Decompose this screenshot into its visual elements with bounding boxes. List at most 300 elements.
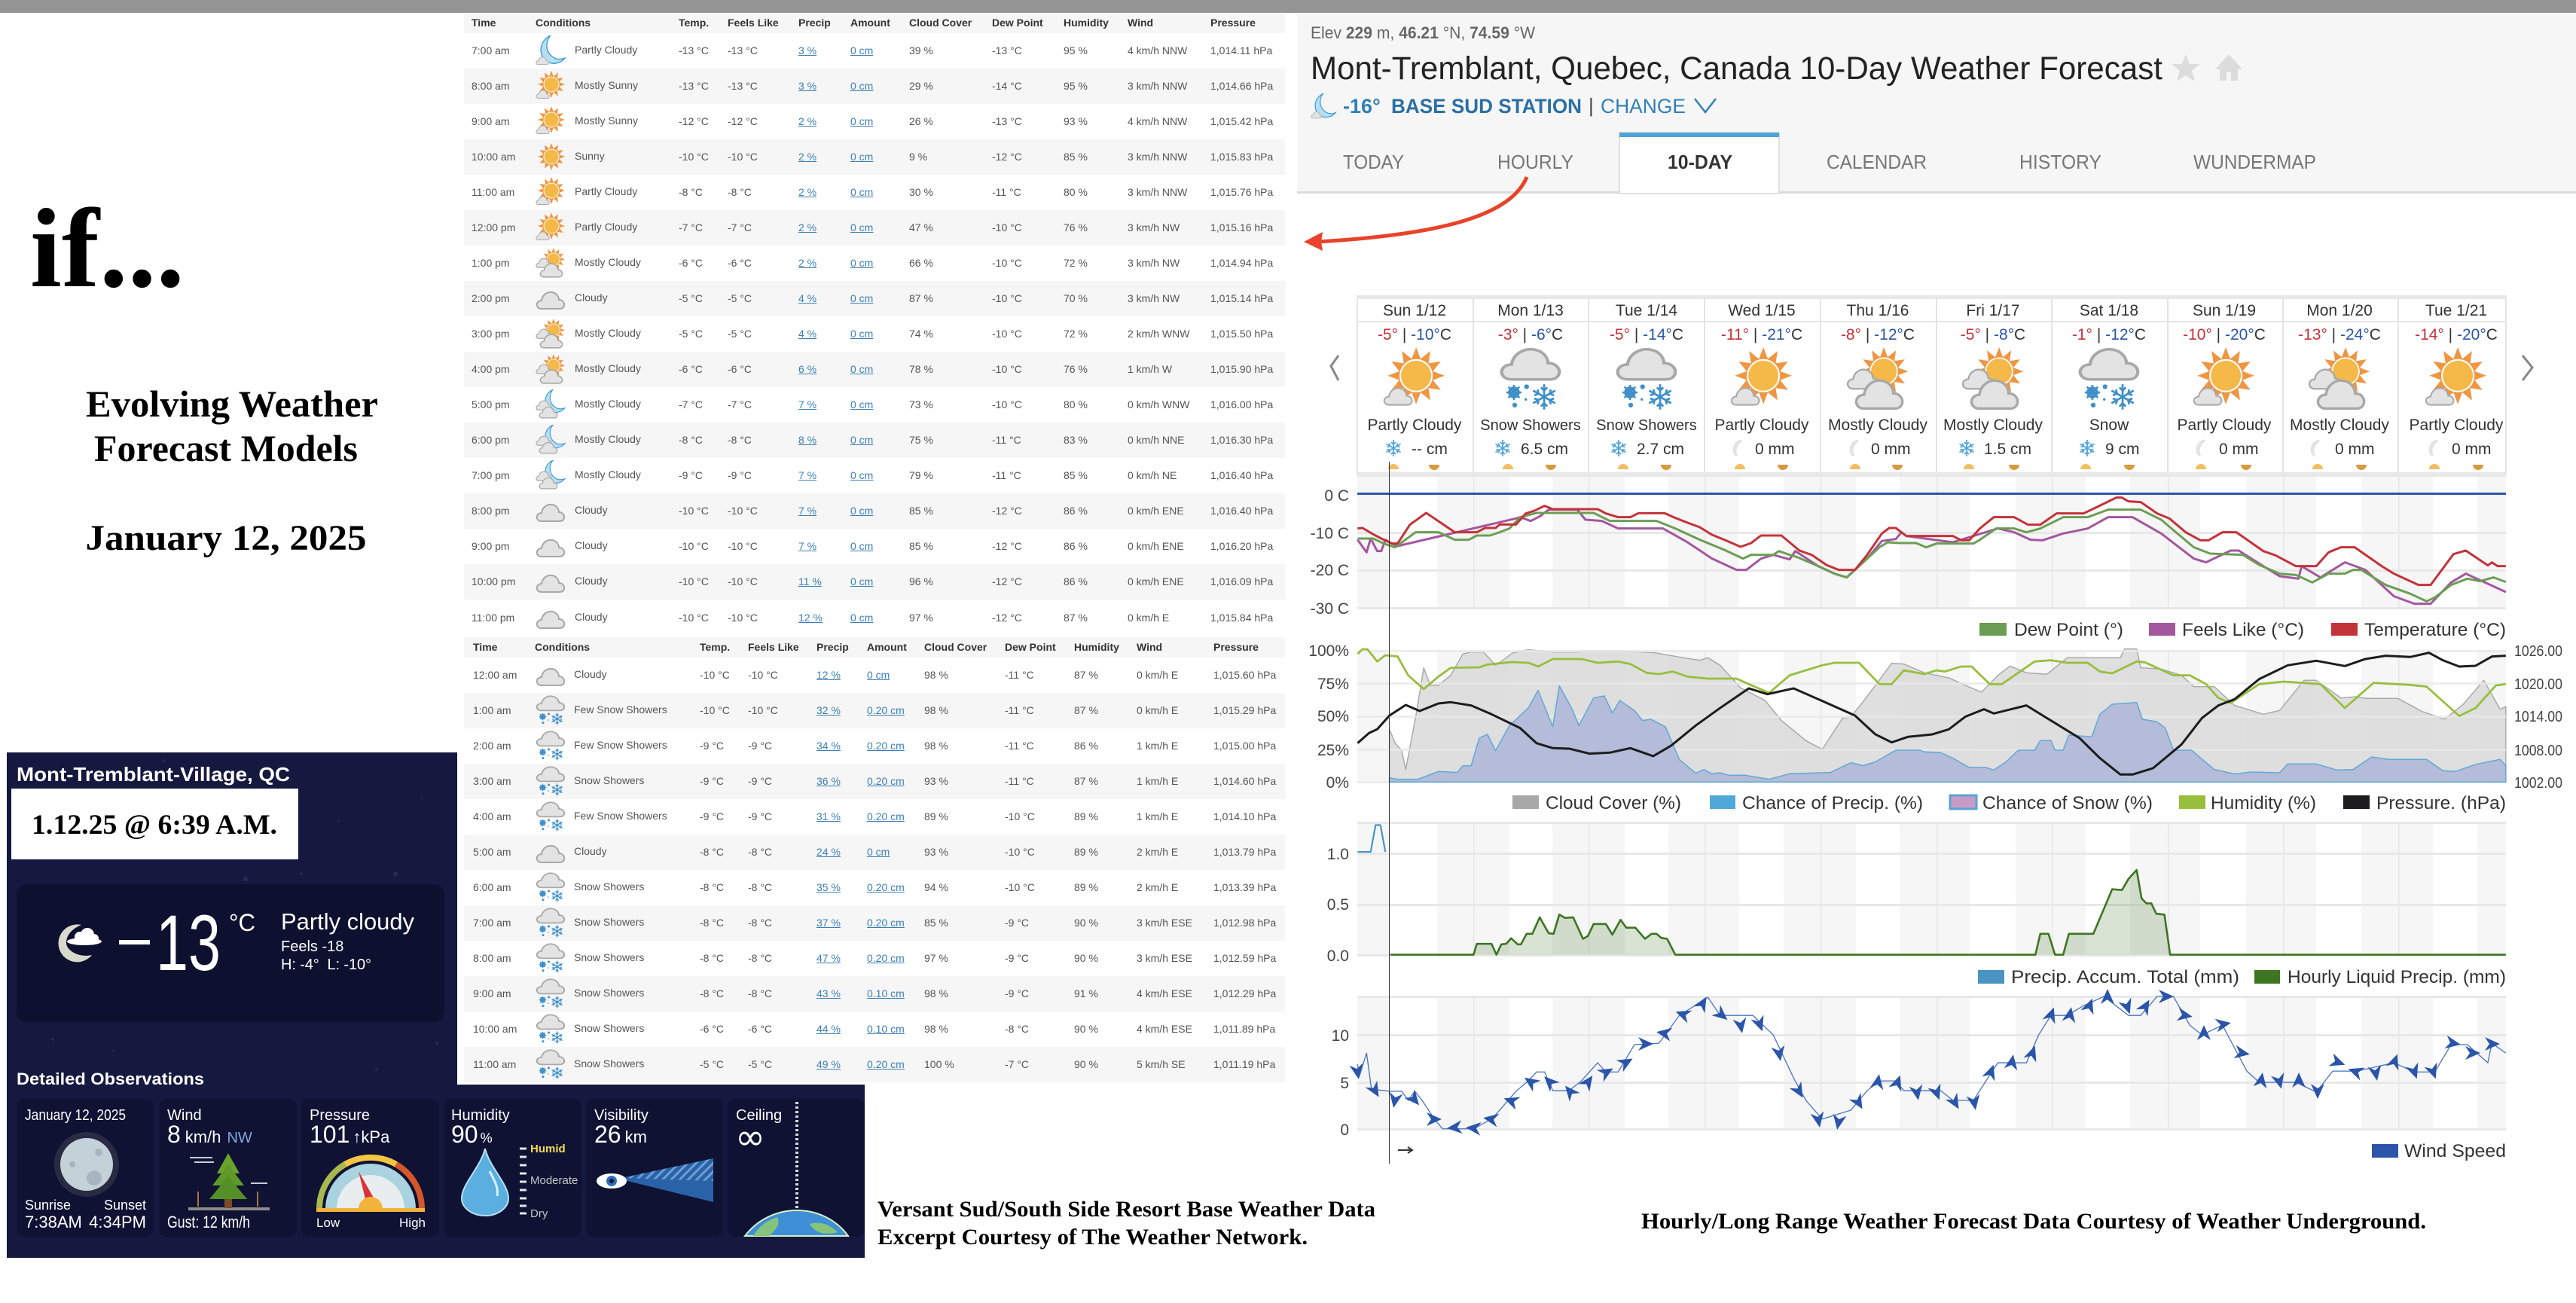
row 6:00 am: 1,013.39 hPa (1213, 881, 1276, 893)
row 10:00 pm: -10 °C (728, 575, 758, 587)
row 10:00 am: Snow Showers (574, 1022, 644, 1034)
title block: if... (30, 186, 378, 558)
row 7:00 pm: -11 °C (992, 469, 1021, 481)
row 4:00 pm: Mostly Cloudy (575, 362, 641, 374)
row 7:00 am: 0 cm (850, 44, 873, 56)
row 8:00 am (473, 943, 1276, 973)
row 9:00 am: 1,012.29 hPa (1213, 987, 1276, 999)
row 2:00 pm: 0 cm (850, 292, 873, 304)
icon: water drop (462, 1149, 508, 1216)
row 4:00 am: -9 °C (748, 810, 772, 822)
row 12:00 am: 0 km/h E (1137, 669, 1178, 681)
day: Sun 1/19: -10° | -20°C (2183, 326, 2266, 343)
row 9:00 pm: 0 km/h ENE (1128, 540, 1184, 552)
row 11:00 pm: -10 °C (679, 612, 709, 624)
row 5:00 pm: 73 % (909, 398, 933, 410)
row 5:00 pm: 0 cm (850, 398, 873, 410)
tabs (1343, 133, 2316, 194)
row 5:00 pm: 80 % (1064, 398, 1088, 410)
row 3:00 am: -9 °C (748, 775, 772, 787)
row 9:00 am: 9:00 am (473, 987, 511, 999)
cursor line and arrow (1389, 462, 1412, 1164)
row 9:00 am: -13 °C (992, 115, 1022, 127)
row 3:00 pm (472, 319, 1273, 349)
row 9:00 pm (472, 539, 1273, 557)
caption: weather underground credit: Hourly/Long Range Weather Forecast Data Courtesy of Weather Underground. (1641, 1209, 2426, 1234)
row 9:00 am: -12 °C (728, 115, 758, 127)
row 1:00 pm: -6 °C (728, 257, 752, 269)
row 6:00 pm: 0 km/h NNE (1128, 434, 1184, 446)
card: humidity: 90% (451, 1121, 493, 1148)
day: Fri 1/17: 1.5 cm (1984, 441, 2031, 458)
table header: Wind (1137, 641, 1162, 653)
row 11:00 am: 5 km/h SE (1137, 1058, 1186, 1070)
day: Sun 1/12: -5° | -10°C (1378, 326, 1451, 343)
row 7:00 pm: 1,016.40 hPa (1210, 469, 1273, 481)
row 5:00 pm: 1,016.00 hPa (1210, 398, 1273, 410)
humidity scale: Dry (530, 1207, 548, 1220)
row 10:00 am: -6 °C (748, 1023, 772, 1035)
panel: wunderground header (1297, 13, 2576, 194)
row 12:00 am: -10 °C (700, 669, 730, 681)
row 3:00 pm: -5 °C (728, 328, 752, 340)
day: Tue 1/21: Tue 1/21 (2425, 302, 2487, 319)
row 7:00 pm: -9 °C (679, 469, 703, 481)
humidity scale: Moderate (530, 1174, 578, 1187)
day: Mon 1/20: 0 mm (2335, 441, 2374, 458)
row 9:00 pm: -10 °C (679, 540, 709, 552)
row 4:00 am: Few Snow Showers (574, 810, 667, 822)
row 5:00 am: -8 °C (748, 846, 772, 858)
row 12:00 pm (464, 210, 1285, 246)
row 7:00 am: 1,012.98 hPa (1213, 917, 1276, 929)
day: Tue 1/21: -14° | -20°C (2415, 326, 2498, 343)
table header: Conditions (536, 17, 591, 29)
table header: Temp. (679, 17, 709, 29)
row 10:00 pm: 86 % (1064, 575, 1088, 587)
row 3:00 am: -11 °C (1005, 775, 1034, 787)
row 11:00 am: -5 °C (748, 1058, 772, 1070)
line chart: temperature, dew point, feels like (1311, 475, 2506, 618)
row 10:00 am: 4 km/h ESE (1137, 1023, 1192, 1035)
row 9:00 am: -8 °C (700, 987, 724, 999)
row 8:00 am: 3 km/h NNW (1128, 80, 1187, 92)
row 3:00 pm: -5 °C (679, 328, 703, 340)
row 2:00 pm: 87 % (909, 292, 933, 304)
row 11:00 am: -5 °C (700, 1058, 724, 1070)
row 11:00 pm: 1,015.84 hPa (1210, 612, 1273, 624)
row 2:00 am: 0.20 cm (867, 740, 905, 752)
row 2:00 am: -9 °C (700, 740, 724, 752)
card: wind (159, 1099, 297, 1237)
caption: weather network credit (877, 1197, 1375, 1250)
row 9:00 am: -9 °C (1005, 987, 1029, 999)
area chart: precipitation: 1.0 (1327, 846, 1349, 863)
row 12:00 pm: 3 km/h NW (1128, 221, 1180, 233)
row 9:00 am: Mostly Sunny (575, 114, 638, 127)
row 8:00 pm: 85 % (909, 505, 933, 517)
row 2:00 am (473, 731, 1276, 761)
line chart: temperature, dew point, feels like: 0 C (1324, 487, 1349, 505)
row 11:00 am (464, 1047, 1285, 1082)
day: Mon 1/20 (2290, 302, 2389, 470)
row 11:00 pm: 12 % (798, 612, 823, 624)
row 3:00 pm: 4 % (798, 328, 816, 340)
row 12:00 pm: 2 % (798, 221, 816, 233)
row 8:00 pm: 0 cm (850, 505, 873, 517)
row 10:00 am: 0 cm (850, 151, 873, 163)
area chart: cloud cover, precipitation, humidity, pressure: 50% (1317, 708, 1349, 725)
row 7:00 pm: 0 km/h NE (1128, 469, 1177, 481)
card: ceiling (728, 1099, 865, 1237)
row 10:00 am: 1,015.83 hPa (1210, 151, 1273, 163)
day: Sun 1/19 (2178, 302, 2272, 470)
row 10:00 am (464, 139, 1285, 175)
temperature (119, 899, 255, 987)
station line: CHANGE (1601, 95, 1686, 117)
row 8:00 am: 29 % (909, 80, 933, 92)
day: Mon 1/13: 6.5 cm (1521, 441, 1568, 458)
legend: cloud and pressure chart (1512, 793, 2506, 813)
legend: temperature chart (1979, 620, 2506, 640)
row 8:00 pm: 8:00 pm (472, 505, 510, 517)
row 2:00 am: 34 % (816, 740, 841, 752)
row 5:00 am: 0 cm (867, 846, 890, 858)
row 6:00 pm: -8 °C (679, 434, 703, 446)
row 8:00 pm: Cloudy (575, 504, 608, 516)
row 9:00 am: 0 cm (850, 115, 873, 127)
day: Fri 1/17 (1943, 302, 2043, 470)
arrow: previous (1331, 356, 1338, 380)
row 11:00 am: 0 cm (850, 186, 873, 198)
station line: -16° (1343, 95, 1381, 117)
row 4:00 pm: -6 °C (679, 363, 703, 375)
row 10:00 pm: -10 °C (679, 575, 709, 587)
row 5:00 am: Cloudy (574, 845, 607, 857)
temperature: 13 (156, 899, 221, 987)
row 4:00 am: 4:00 am (473, 810, 511, 822)
row 11:00 am (472, 177, 1273, 205)
row 6:00 am: -8 °C (748, 881, 772, 893)
row 2:00 pm: 70 % (1064, 292, 1088, 304)
row 11:00 am: -8 °C (728, 186, 752, 198)
row 2:00 am: 1,015.00 hPa (1213, 740, 1276, 752)
row 7:00 am: 95 % (1064, 44, 1088, 56)
row 5:00 am: 89 % (1074, 846, 1098, 858)
row 11:00 am: 11:00 am (472, 186, 514, 198)
table header: Humidity (1074, 641, 1119, 653)
heading: evolving weather forecast models (86, 383, 378, 469)
row 6:00 am (473, 872, 1276, 902)
row 10:00 am: 3 km/h NNW (1128, 151, 1187, 163)
day: Sat 1/18: Sat 1/18 (2080, 302, 2138, 319)
row 9:00 am: -8 °C (748, 987, 772, 999)
table: hourly forecast overnight (464, 637, 1285, 1082)
row 11:00 am: 30 % (909, 186, 933, 198)
row 9:00 am: Snow Showers (574, 987, 644, 999)
row 9:00 am: 26 % (909, 115, 933, 127)
row 3:00 am: 36 % (816, 775, 841, 787)
line chart: wind speed: 0 (1340, 1121, 1349, 1139)
day: Tue 1/14 (1596, 302, 1697, 470)
table: hourly forecast evening (464, 13, 1285, 629)
row 9:00 pm: 1,016.20 hPa (1210, 540, 1273, 552)
card: pressure: High (399, 1216, 426, 1230)
row 4:00 am: 1,014.10 hPa (1213, 810, 1276, 822)
row 12:00 am: 98 % (924, 669, 948, 681)
row 12:00 am: Cloudy (574, 668, 607, 680)
row 11:00 am: 3 km/h NNW (1128, 186, 1187, 198)
area chart: precipitation: 0.0 (1327, 947, 1349, 965)
day: Thu 1/16 (1828, 302, 1927, 470)
day: Sun 1/12: Partly Cloudy (1368, 417, 1462, 434)
row 1:00 pm: -10 °C (992, 257, 1022, 269)
row 3:00 am: 1 km/h E (1137, 775, 1178, 787)
icon: pressure gauge (316, 1158, 425, 1212)
legend: cloud and pressure chart: Pressure. (hPa) (2376, 793, 2506, 813)
row 10:00 am: 10:00 am (473, 1023, 517, 1035)
row 9:00 pm: 0 cm (850, 540, 873, 552)
row 2:00 am: 98 % (924, 740, 948, 752)
row 6:00 pm: 75 % (909, 434, 933, 446)
condition text (281, 908, 414, 973)
row 9:00 am (464, 976, 1285, 1012)
row 10:00 am: -6 °C (700, 1023, 724, 1035)
row 3:00 pm: 2 km/h WNW (1128, 328, 1189, 340)
row 1:00 am: 98 % (924, 704, 948, 716)
area chart: cloud cover, precipitation, humidity, pressure: 1008.00 (2514, 743, 2562, 759)
area chart: cloud cover, precipitation, humidity, pressure: 1026.00 (2514, 643, 2562, 660)
row 9:00 am: 9:00 am (472, 115, 510, 127)
day: Tue 1/14: -5° | -14°C (1610, 326, 1683, 343)
row 3:00 am: 1,014.60 hPa (1213, 775, 1276, 787)
row 8:00 am: 8:00 am (472, 80, 510, 92)
row 9:00 pm: 7 % (798, 540, 816, 552)
active tab: 10-day: 10-DAY (1668, 151, 1732, 173)
legend: precipitation chart (1978, 967, 2506, 987)
legend: cloud and pressure chart: Humidity (%) (2211, 793, 2316, 813)
row 3:00 pm: 72 % (1064, 328, 1088, 340)
caption: weather network credit: Versant Sud/South Side Resort Base Weather Data (877, 1197, 1375, 1222)
row 6:00 pm: 8 % (798, 434, 816, 446)
row 12:00 pm: 0 cm (850, 221, 873, 233)
day: Mon 1/13 (1480, 302, 1581, 470)
day: Fri 1/17: Mostly Cloudy (1943, 417, 2043, 434)
row 1:00 pm: 0 cm (850, 257, 873, 269)
day: Thu 1/16: 0 mm (1871, 441, 1910, 458)
row 9:00 am: -12 °C (679, 115, 709, 127)
row 6:00 pm (464, 423, 1285, 458)
legend: temperature chart: Dew Point (°) (2014, 620, 2123, 640)
temperature: °C (229, 909, 255, 936)
icon: home (2215, 54, 2242, 81)
row 7:00 am: -13 °C (679, 44, 709, 56)
row 7:00 am: -13 °C (992, 44, 1022, 56)
day: Mon 1/13: -3° | -6°C (1498, 326, 1563, 343)
tabs: TODAY (1343, 151, 1404, 173)
day: Sat 1/18: Snow (2089, 417, 2129, 434)
area chart: cloud cover, precipitation, humidity, pressure: 1014.00 (2514, 709, 2562, 725)
day: Sat 1/18: -1° | -12°C (2072, 326, 2146, 343)
row 7:00 pm: 0 cm (850, 469, 873, 481)
legend: temperature chart: Feels Like (°C) (2182, 620, 2304, 640)
row 1:00 am: 32 % (816, 704, 841, 716)
row 5:00 pm: 7 % (798, 398, 816, 410)
row 2:00 pm: 2:00 pm (472, 292, 510, 304)
line chart: wind speed (1332, 989, 2506, 1139)
row 8:00 am: 3 km/h ESE (1137, 952, 1192, 964)
area chart: cloud cover, precipitation, humidity, pressure: 0% (1326, 774, 1349, 792)
row 9:00 pm: -12 °C (992, 540, 1022, 552)
row 3:00 am: 0.20 cm (867, 775, 905, 787)
card: humidity: Humidity (451, 1107, 510, 1124)
day: Tue 1/14: Snow Showers (1596, 417, 1697, 434)
row 10:00 pm: 1,016.09 hPa (1210, 575, 1273, 587)
row 4:00 pm: -6 °C (728, 363, 752, 375)
row 10:00 pm: 0 km/h ENE (1128, 575, 1184, 587)
row 11:00 pm: 87 % (1064, 612, 1088, 624)
day: Wed 1/15: Wed 1/15 (1728, 302, 1796, 319)
line chart: wind speed: 5 (1340, 1075, 1349, 1092)
row 4:00 pm (464, 352, 1285, 387)
table header: Precip (816, 641, 849, 653)
row 8:00 pm: 1,016.40 hPa (1210, 505, 1273, 517)
day: Sun 1/12 (1368, 302, 1462, 470)
row 11:00 am: 11:00 am (473, 1058, 516, 1070)
row 9:00 pm: 86 % (1064, 540, 1088, 552)
row 10:00 pm: Cloudy (575, 575, 608, 587)
row 7:00 am: -9 °C (1005, 917, 1029, 929)
humidity scale: Humid (530, 1143, 566, 1155)
table header: Humidity (1064, 17, 1109, 29)
tabs: HISTORY (2019, 151, 2101, 173)
row 11:00 pm (472, 610, 1273, 629)
row 8:00 pm (464, 493, 1285, 529)
table header: Time (473, 641, 497, 653)
row 7:00 am: 3 % (798, 44, 816, 56)
row 9:00 am: 4 km/h ESE (1137, 987, 1192, 999)
row 4:00 pm: 78 % (909, 363, 933, 375)
forecast day strip (1331, 295, 2532, 476)
row 3:00 am (464, 764, 1285, 799)
row 11:00 am: -8 °C (679, 186, 703, 198)
heading: detailed observations: Detailed Observations (17, 1070, 204, 1088)
row 11:00 am: 80 % (1064, 186, 1088, 198)
table header (464, 637, 1285, 658)
table header: Amount (850, 17, 890, 29)
row 2:00 pm: 3 km/h NW (1128, 292, 1180, 304)
card: visibility: 26km (594, 1121, 647, 1148)
row 8:00 am: 8:00 am (473, 952, 511, 964)
row 1:00 pm: -6 °C (679, 257, 703, 269)
row 2:00 am: 1 km/h E (1137, 740, 1178, 752)
row 8:00 pm: 7 % (798, 505, 816, 517)
row 8:00 am: -8 °C (748, 952, 772, 964)
row 7:00 am: 37 % (816, 917, 841, 929)
row 4:00 pm: -10 °C (992, 363, 1022, 375)
row 11:00 pm: -12 °C (992, 612, 1022, 624)
condition text: H: -4° L: -10° (281, 957, 371, 973)
row 6:00 pm: 1,016.30 hPa (1210, 434, 1273, 446)
row 6:00 am: -10 °C (1005, 881, 1035, 893)
row 12:00 pm: -10 °C (992, 221, 1022, 233)
row 10:00 am: -10 °C (728, 151, 758, 163)
row 7:00 am: 90 % (1074, 917, 1098, 929)
row 8:00 am: Mostly Sunny (575, 79, 638, 91)
date stamp callout: 1.12.25 @ 6:39 A.M. (32, 810, 277, 841)
row 11:00 pm: 0 cm (850, 612, 873, 624)
row 3:00 pm: 3:00 pm (472, 328, 510, 340)
day: Mon 1/13: Snow Showers (1480, 417, 1581, 434)
row 5:00 am: 93 % (924, 846, 948, 858)
row 5:00 am: -10 °C (1005, 846, 1035, 858)
row 7:00 am: Snow Showers (574, 916, 644, 928)
row 5:00 am: 2 km/h E (1137, 846, 1178, 858)
card: pressure: Pressure (310, 1107, 370, 1124)
legend: cloud and pressure chart: Chance of Snow (%) (1982, 793, 2153, 813)
row 4:00 pm: 1,015.90 hPa (1210, 363, 1273, 375)
row 11:00 pm: 97 % (909, 612, 933, 624)
row 8:00 pm: -10 °C (679, 505, 709, 517)
table header: Amount (867, 641, 907, 653)
row 11:00 pm: 0 km/h E (1128, 612, 1169, 624)
day: Mon 1/20: -13° | -24°C (2298, 326, 2381, 343)
row 1:00 am: Few Snow Showers (574, 703, 667, 716)
row 10:00 pm (464, 564, 1285, 600)
row 6:00 am: 0.20 cm (867, 881, 905, 893)
row 1:00 am: 1,015.29 hPa (1213, 704, 1276, 716)
row 12:00 am: -10 °C (748, 669, 778, 681)
row 8:00 am: 0 cm (850, 80, 873, 92)
row 11:00 pm: -10 °C (728, 612, 758, 624)
row 10:00 am: -8 °C (1005, 1023, 1029, 1035)
day: Wed 1/15 (1715, 302, 1809, 470)
row 4:00 pm: 6 % (798, 363, 816, 375)
row 12:00 pm: 12:00 pm (472, 221, 515, 233)
icon: moon (54, 1132, 119, 1197)
arrow: next (2523, 356, 2532, 380)
date stamp callout (11, 789, 298, 859)
table header: Dew Point (1005, 641, 1056, 653)
row 10:00 am: 9 % (909, 151, 927, 163)
row 10:00 am: 44 % (816, 1023, 841, 1035)
day: Wed 1/15: 0 mm (1755, 441, 1794, 458)
humidity scale (520, 1143, 578, 1220)
row 8:00 am: 3 % (798, 80, 816, 92)
row 6:00 am: -8 °C (700, 881, 724, 893)
row 2:00 pm (464, 281, 1285, 316)
row 4:00 pm: 76 % (1064, 363, 1088, 375)
row 1:00 pm (472, 248, 1273, 278)
legend: temperature chart: Temperature (°C) (2364, 620, 2506, 640)
row 4:00 pm: 4:00 pm (472, 363, 510, 375)
row 7:00 am: 1,014.11 hPa (1210, 44, 1272, 56)
row 10:00 pm: 10:00 pm (472, 575, 515, 587)
area chart: cloud cover, precipitation, humidity, pressure: 75% (1317, 676, 1349, 693)
row 8:00 am: 0.20 cm (867, 952, 905, 964)
day: Sun 1/12: Sun 1/12 (1383, 302, 1446, 319)
row 8:00 am: -14 °C (992, 80, 1022, 92)
tabs: WUNDERMAP (2193, 151, 2316, 173)
row 3:00 pm: Mostly Cloudy (575, 327, 641, 339)
row 6:00 pm: 0 cm (850, 434, 873, 446)
table header: Conditions (535, 641, 590, 653)
area chart: precipitation: 0.5 (1327, 896, 1349, 914)
card: date and moon: January 12, 2025 (25, 1107, 126, 1124)
line chart: temperature, dew point, feels like: -30 C (1311, 600, 1349, 618)
row 1:00 pm: 2 % (798, 257, 816, 269)
row 1:00 pm: 72 % (1064, 257, 1088, 269)
